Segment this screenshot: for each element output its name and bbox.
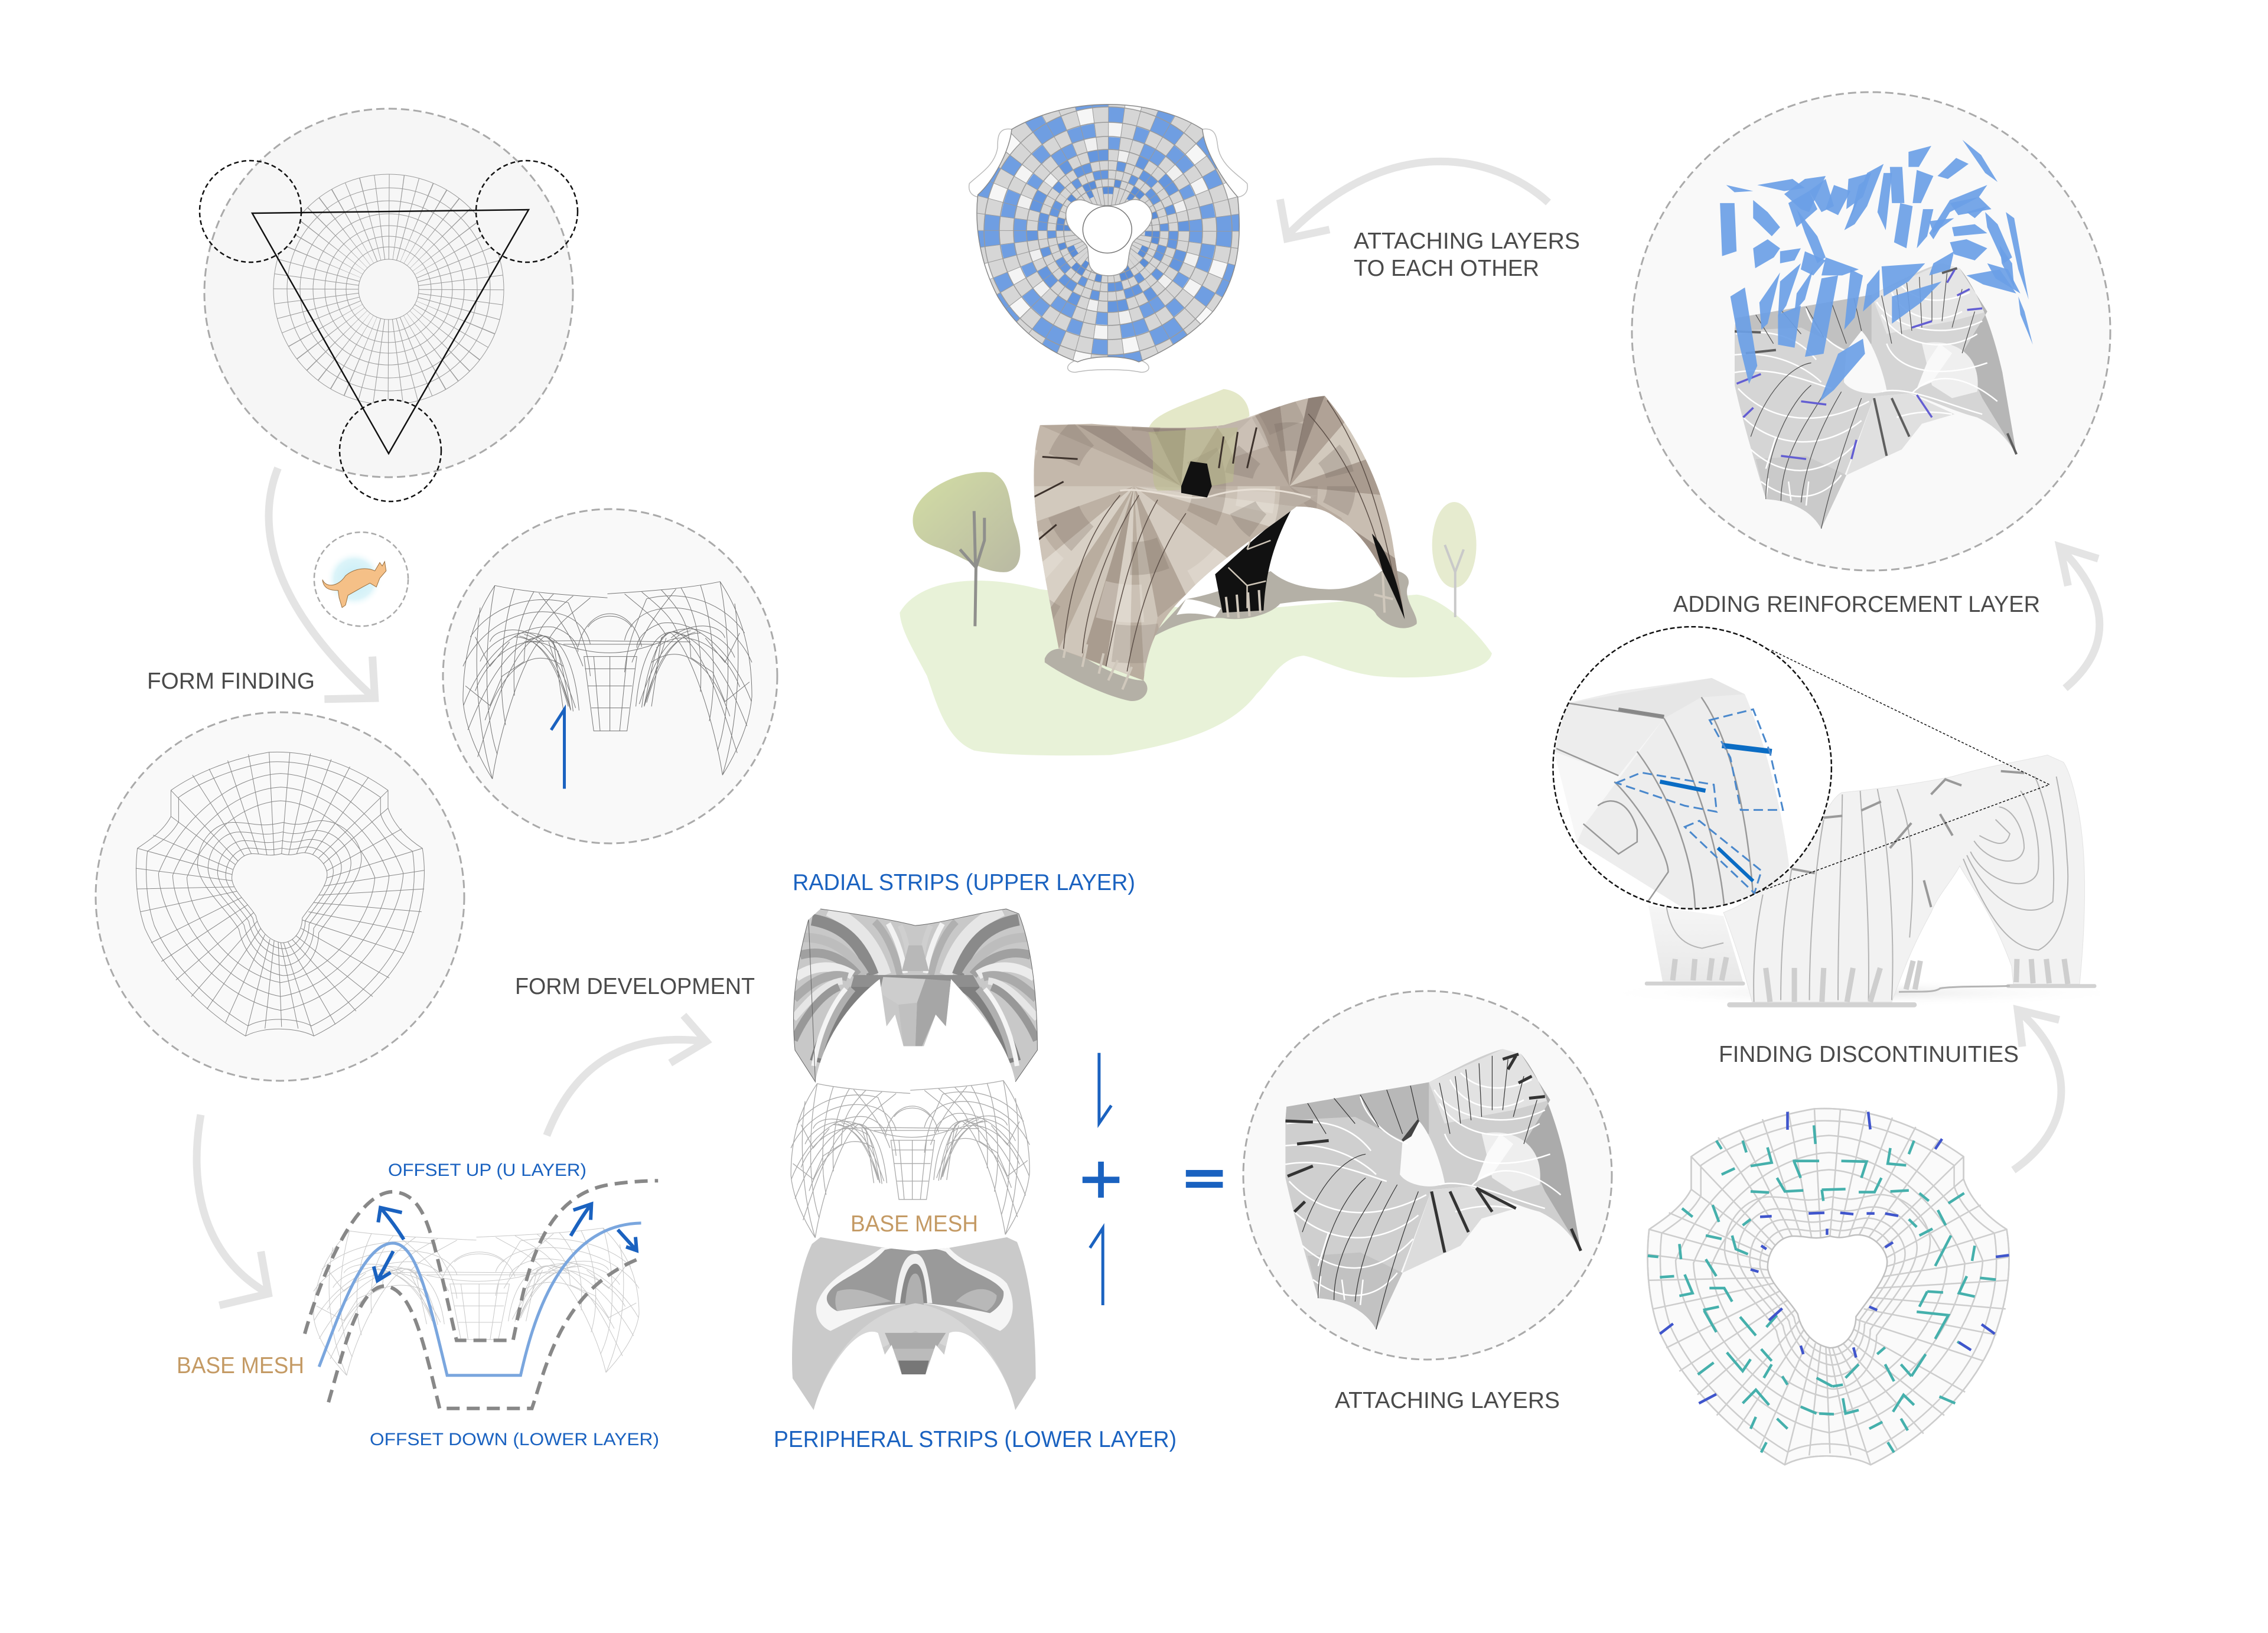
arrow: offset to form development bbox=[547, 1015, 706, 1136]
panel: wire mesh elevated bbox=[443, 509, 777, 843]
plus sign bbox=[1083, 1162, 1119, 1198]
arrow: up bbox=[551, 709, 565, 788]
right tree bbox=[1432, 502, 1477, 617]
foot ribs bbox=[1673, 957, 2068, 1002]
text: finding discontinuities: FINDING DISCONTINUITIES bbox=[1719, 1042, 2019, 1067]
form: peripheral strips lower layer bbox=[790, 1234, 1041, 1416]
ground bbox=[900, 581, 1492, 755]
blue reinforcement bars bbox=[1660, 745, 1772, 881]
text: offset up: OFFSET UP (U LAYER) bbox=[388, 1161, 586, 1180]
right fan bbox=[1252, 396, 1405, 620]
arrow: up bbox=[1090, 1228, 1103, 1305]
text: offset down: OFFSET DOWN (LOWER LAYER) bbox=[370, 1430, 659, 1449]
text: attaching layers: ATTACHING LAYERS bbox=[1335, 1388, 1560, 1413]
render: white pavilion bbox=[1591, 755, 2135, 1008]
panel: reinforcement layer bbox=[1632, 92, 2110, 571]
arrow: attaching layers bbox=[1280, 161, 1549, 239]
plan: blue checker layers bbox=[969, 104, 1248, 373]
circle background bbox=[96, 712, 464, 1081]
text: form development: FORM DEVELOPMENT bbox=[515, 974, 755, 999]
blue offset arrows bbox=[374, 1204, 637, 1280]
rear leg bbox=[1648, 905, 1743, 982]
arrow: plan to white pavilion bbox=[2013, 1010, 2061, 1170]
symbols: arrows plus equals bbox=[1083, 1053, 1223, 1305]
circle background bbox=[1632, 92, 2110, 571]
circle background bbox=[204, 109, 573, 477]
base curve bbox=[319, 1223, 641, 1375]
triangle bbox=[252, 210, 529, 454]
panel: flat plan mesh bbox=[96, 712, 464, 1081]
arrow: plan to offset bbox=[197, 1114, 268, 1305]
arrow: down bbox=[1099, 1053, 1112, 1123]
blue dashed outlines bbox=[1617, 709, 1783, 893]
faded wire background bbox=[314, 1228, 639, 1375]
plan mesh bbox=[136, 752, 425, 1036]
text: radial strips: RADIAL STRIPS (UPPER LAYER) bbox=[793, 870, 1135, 895]
wire mesh bbox=[463, 582, 752, 779]
arrow: triangle to form finding bbox=[269, 468, 375, 699]
attached form bbox=[1285, 1049, 1581, 1329]
circle background bbox=[443, 509, 777, 843]
plan mesh bbox=[1647, 1109, 2009, 1465]
text: attaching layers to each other: TO EACH OTHER bbox=[1354, 256, 1539, 281]
concrete slabs bbox=[1045, 649, 1148, 701]
seams bbox=[1666, 777, 2068, 1002]
text: attaching layers to each other bbox=[1354, 229, 1580, 281]
front lobe fan bbox=[1034, 402, 1318, 680]
black opening bbox=[1181, 461, 1212, 497]
lower offset dashed bbox=[328, 1258, 641, 1409]
panel: attaching layers bbox=[1243, 991, 1612, 1360]
detail circle: zoomed joint bbox=[1553, 627, 2049, 914]
text: adding reinforcement layer: ADDING REINFORCEMENT LAYER bbox=[1673, 592, 2040, 617]
dashed corner circles bbox=[200, 161, 578, 501]
text: attaching layers to each other: ATTACHING LAYERS bbox=[1354, 229, 1580, 254]
text: form finding: FORM FINDING bbox=[147, 669, 315, 694]
checker rings bbox=[977, 105, 1239, 361]
text: peripheral strips: PERIPHERAL STRIPS (LOWER LAYER) bbox=[774, 1427, 1177, 1452]
discontinuity highlights bbox=[1648, 1112, 2009, 1452]
icon: kangaroo bbox=[314, 532, 408, 626]
centre hole bbox=[1066, 200, 1152, 276]
wood shell bbox=[1034, 396, 1405, 680]
centre circle bbox=[1083, 206, 1132, 253]
base plates bbox=[1645, 982, 2096, 1008]
illustration: wood pavilion in landscape bbox=[900, 389, 1492, 756]
blue strips bbox=[1720, 140, 2033, 402]
main shell bbox=[1723, 755, 2085, 1002]
back tree bbox=[1148, 389, 1249, 432]
circle background bbox=[1243, 991, 1612, 1360]
left tree bbox=[913, 472, 1020, 626]
form: radial strips upper layer bbox=[790, 904, 1041, 1086]
black inner leg bbox=[1215, 509, 1292, 612]
panel: discontinuity plan bbox=[1647, 1109, 2009, 1465]
radial mesh bbox=[273, 174, 504, 405]
ground shadow bbox=[1591, 979, 2135, 1006]
text: base mesh center: BASE MESH bbox=[850, 1211, 978, 1237]
outer edge bbox=[977, 105, 1239, 362]
form: base mesh wire bbox=[791, 1081, 1029, 1238]
equals sign bbox=[1186, 1170, 1223, 1188]
foot pads bbox=[969, 129, 1247, 372]
arrow: pavilion to reinforcement bbox=[2060, 547, 2100, 688]
front foot posts bbox=[1064, 633, 1132, 689]
text: base mesh left: BASE MESH bbox=[177, 1353, 304, 1378]
grey form bbox=[1735, 263, 2016, 529]
circle outline bbox=[1553, 627, 1832, 909]
diagram: offset section bbox=[305, 1181, 658, 1409]
infographic canvas bbox=[94, 91, 2111, 1466]
zoom leader lines bbox=[1755, 650, 2049, 893]
back fan bbox=[1040, 418, 1294, 486]
panel: triangle form finding bbox=[200, 109, 578, 501]
upper offset dashed bbox=[305, 1181, 658, 1340]
